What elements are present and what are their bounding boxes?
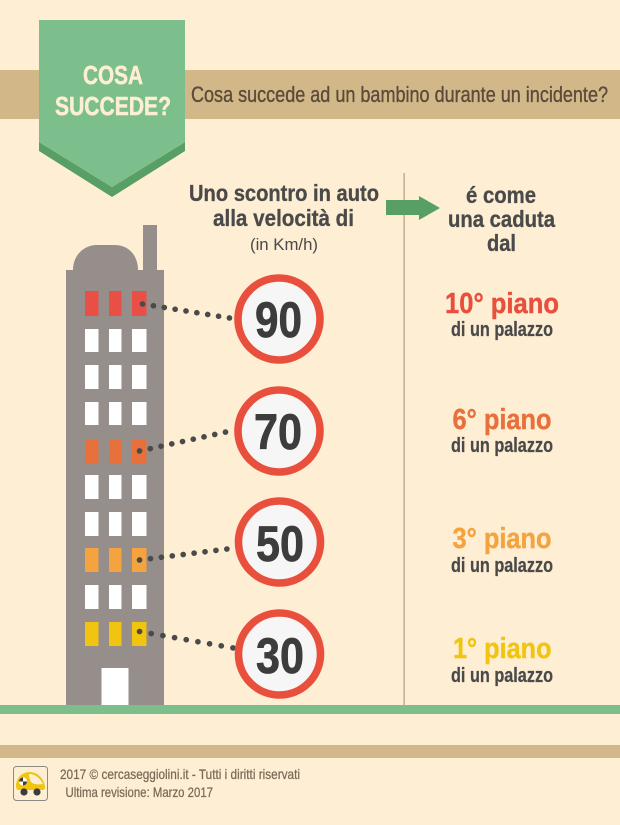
result: 1st floor: [451, 633, 553, 687]
speed sign 90: [238, 278, 320, 360]
left column heading: (in Km/h): [250, 235, 318, 254]
result: 10th floor: di un palazzo: [451, 319, 553, 341]
footer text: 2017 © cercaseggiolini.it - Tutti i diritti riservati: [60, 766, 300, 782]
result: 10th floor: 10° piano: [445, 288, 559, 320]
result: 10th floor: [445, 288, 559, 341]
windows: white floors upper: [85, 329, 146, 425]
speed sign 50: [238, 501, 320, 583]
speed sign 50: 50: [256, 516, 304, 572]
windows: white floor lower: [85, 585, 146, 609]
left column heading: alla velocità di: [213, 205, 354, 231]
result: 1st floor: 1° piano: [453, 633, 552, 665]
footer band: [0, 745, 620, 758]
dotted connector 50: [140, 549, 227, 560]
ground line: [0, 705, 620, 714]
building door: [102, 668, 128, 705]
logo: yellow car: [14, 766, 48, 800]
dotted connector 30: [140, 632, 234, 648]
footer text: Ultima revisione: Marzo 2017: [66, 784, 213, 800]
speed sign 30: 30: [256, 628, 304, 684]
windows: 10th floor: [85, 291, 146, 316]
windows: white floors middle: [85, 475, 146, 536]
result: 3rd floor: 3° piano: [452, 523, 552, 555]
result: 6th floor: [451, 404, 553, 457]
right column heading: dal: [487, 230, 516, 256]
divider line: [404, 173, 405, 705]
speed sign 70: 70: [254, 404, 302, 460]
windows: 3rd floor: [85, 548, 146, 572]
right column heading: [448, 182, 555, 256]
right column heading: una caduta: [448, 206, 555, 232]
header band: [0, 70, 620, 119]
title text: COSA: [83, 60, 143, 90]
result: 6th floor: 6° piano: [452, 404, 552, 436]
speed sign 30: [238, 613, 320, 695]
arrow: [386, 196, 440, 220]
footer text: [60, 766, 300, 800]
windows: 6th floor: [85, 439, 146, 463]
windows: 1st floor: [85, 622, 146, 646]
left column heading: Uno scontro in auto: [189, 180, 379, 206]
result: 3rd floor: [451, 523, 553, 577]
speed sign 90: 90: [255, 292, 302, 348]
result: 1st floor: di un palazzo: [451, 665, 553, 687]
building: [66, 225, 164, 705]
title text: [55, 60, 171, 121]
title text: SUCCEDE?: [55, 91, 171, 121]
result: 6th floor: di un palazzo: [451, 435, 553, 457]
result: 3rd floor: di un palazzo: [451, 555, 553, 577]
left column heading: [189, 180, 379, 254]
dotted connector 70: [140, 432, 226, 451]
right column heading: é come: [466, 182, 536, 208]
title ribbon: [39, 20, 185, 197]
speed sign 70: [238, 390, 320, 472]
dotted connector 90: [142, 304, 230, 318]
